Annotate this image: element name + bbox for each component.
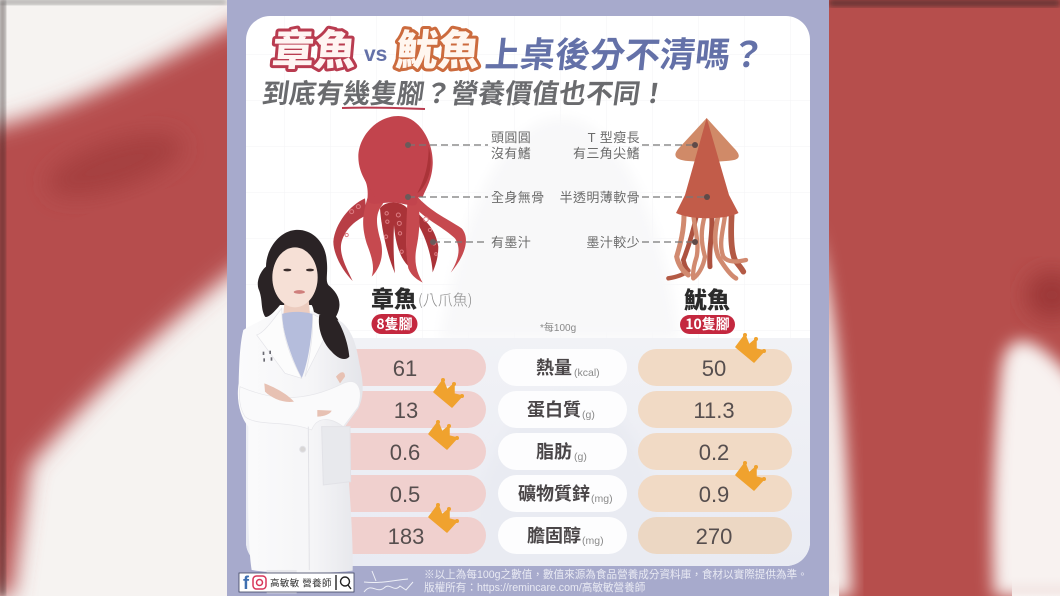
- octopus dark right arm: [418, 213, 438, 272]
- row: cholesterol: (mg): [582, 535, 604, 547]
- blouse: [282, 312, 313, 378]
- squid name: 魷魚: [684, 281, 730, 315]
- callout: cartilage: 半透明薄軟骨: [560, 190, 640, 205]
- callout: head: [405, 130, 531, 161]
- callout: fin: T 型瘦長: [588, 130, 640, 145]
- octopus name: (八爪魚): [418, 289, 472, 310]
- hands: [264, 372, 345, 417]
- callout: cartilage: [560, 190, 710, 205]
- row: zinc: 0.9: [699, 482, 729, 507]
- card grid pattern and watermark: [246, 16, 810, 566]
- callout: head: 沒有鰭: [491, 146, 531, 161]
- row: calories: 61: [393, 356, 417, 381]
- octopus back left arm: [333, 198, 367, 281]
- squid mantle: [676, 118, 738, 218]
- blurred background: right: [815, 0, 1060, 596]
- crowns marking higher values: [429, 333, 766, 532]
- row: zinc: 礦物質鋅: [518, 480, 590, 506]
- blurred background: left: [0, 0, 227, 596]
- nutrition table: [330, 349, 792, 554]
- octopus right arm: [413, 192, 466, 273]
- row: protein: 11.3: [693, 398, 735, 423]
- octopus name: [371, 280, 472, 314]
- signature: [364, 571, 413, 592]
- octopus head: [358, 116, 433, 197]
- row: fat: [330, 433, 792, 470]
- callout: fin: 有三角尖鰭: [573, 146, 640, 161]
- octopus name: 章魚: [371, 280, 417, 314]
- footnote: [424, 568, 808, 594]
- row: calories: [330, 349, 792, 386]
- instagram icon: [253, 576, 266, 589]
- octopus illustration: [333, 116, 466, 283]
- callout: ink: 有墨汁: [491, 235, 531, 250]
- row: cholesterol: [330, 517, 792, 554]
- per 100g note: *每100g: [540, 321, 576, 334]
- octopus dark inner arms: [380, 202, 409, 273]
- row: cholesterol: 183: [388, 524, 424, 549]
- row: fat: 脂肪: [536, 438, 572, 464]
- callout: fin: [573, 130, 698, 161]
- octopus callouts: [405, 130, 545, 250]
- squid callouts: [560, 130, 710, 250]
- octopus neck: [365, 180, 428, 206]
- subtitle underline: [342, 108, 425, 109]
- coat name tag: [263, 351, 272, 362]
- callout: little ink: 墨汁較少: [586, 235, 640, 250]
- row: fat: 0.2: [699, 440, 729, 465]
- squid tentacles: [668, 215, 746, 278]
- callout: little ink: [586, 235, 698, 250]
- footnote: ※以上為每100g之數值，數值來源為食品營養成分資料庫，食材以實際提供為準。: [424, 568, 808, 581]
- octopus badge: 8隻腳: [376, 314, 413, 334]
- octopus suckers: [345, 205, 437, 255]
- title: vs: vs: [364, 43, 387, 66]
- white card: [246, 16, 810, 566]
- callout: head: 頭圓圓: [491, 130, 531, 145]
- footnote: 版權所有：https://remincare.com/高敏敏營養師: [424, 581, 646, 594]
- title: question: 上桌後分不清嗎？: [483, 27, 768, 78]
- row: protein: 蛋白質: [527, 396, 581, 422]
- row: protein: [330, 391, 792, 428]
- left hair lock: [319, 315, 349, 359]
- row: cholesterol: 膽固醇: [527, 522, 581, 548]
- search icon: [336, 575, 351, 590]
- row: calories: 熱量: [536, 354, 572, 380]
- facebook icon: f: [243, 573, 250, 593]
- octopus left front arm: [363, 198, 383, 277]
- row: zinc: (mg): [591, 493, 613, 505]
- row: protein: (g): [582, 409, 595, 421]
- squid illustration: [668, 118, 746, 278]
- neck: [283, 295, 310, 315]
- hair back: [258, 230, 348, 355]
- social handle box: [239, 573, 354, 593]
- legs: [267, 570, 297, 593]
- coat lapels: [257, 308, 330, 378]
- row: calories: (kcal): [574, 367, 600, 379]
- face: [272, 247, 318, 307]
- subtitle: 到底有幾隻腳？營養價值也不同！: [260, 72, 670, 111]
- title: octopus word: 章魚: [270, 17, 359, 78]
- row: protein: 13: [394, 398, 418, 423]
- coat pocket and button: [300, 427, 351, 570]
- row: zinc: 0.5: [390, 482, 420, 507]
- callout: boneless: 全身無骨: [491, 190, 545, 205]
- purple poster background: [227, 0, 829, 596]
- crossed forearms: [239, 382, 360, 430]
- squid fins: [675, 118, 739, 162]
- row: fat: 0.6: [390, 440, 420, 465]
- title: squid word: 魷魚: [394, 17, 483, 78]
- title line 1: [270, 17, 768, 78]
- eyes and lips: [283, 269, 314, 294]
- lab coat: [238, 307, 363, 573]
- row: calories: 50: [702, 356, 726, 381]
- squid badge: 10隻腳: [685, 314, 730, 334]
- octopus centre front arm: [406, 198, 423, 283]
- fringe: [270, 233, 321, 278]
- row: fat: (g): [574, 451, 587, 463]
- row: cholesterol: 270: [696, 524, 732, 549]
- row: zinc: [330, 475, 792, 512]
- handle text: 高敏敏 營養師: [270, 576, 332, 590]
- dietitian portrait: [238, 230, 363, 593]
